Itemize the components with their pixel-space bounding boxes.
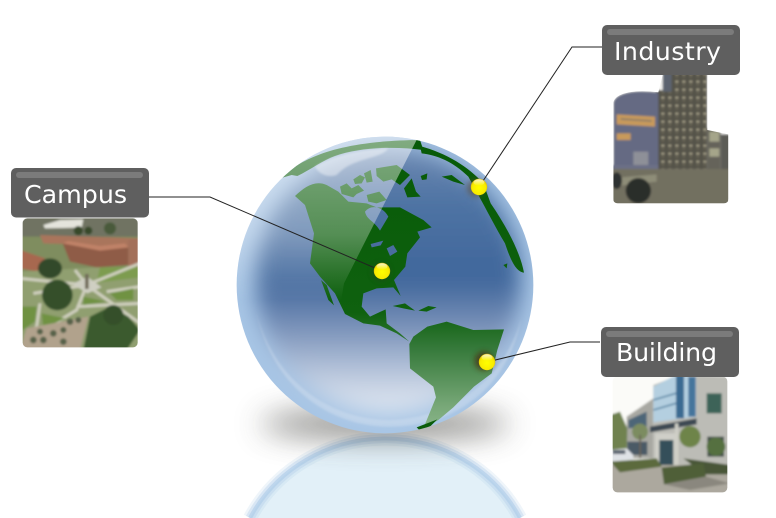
photo: office building — [610, 373, 730, 495]
arctic coastline — [280, 140, 423, 178]
pin: campus — [372, 263, 390, 281]
globe rim — [237, 137, 533, 433]
greenland — [404, 178, 421, 197]
glass highlight — [237, 136, 416, 292]
globe ground shadow — [260, 409, 510, 439]
label: Building: Building — [616, 338, 717, 367]
connector: campus — [149, 197, 382, 271]
baja california — [321, 280, 334, 305]
pin: industry — [467, 179, 487, 197]
continents — [280, 140, 524, 428]
label: Industry: Industry — [614, 37, 721, 66]
connector: building — [487, 342, 600, 362]
connector: industry — [479, 47, 602, 187]
globe — [237, 130, 533, 433]
globe ocean — [256, 147, 521, 413]
north america — [295, 183, 432, 342]
pin: building — [474, 352, 495, 370]
photo: industry towers — [610, 72, 732, 207]
far side landmass crescent — [420, 146, 524, 273]
label: Campus — [11, 168, 149, 218]
inner bottom glow — [264, 332, 518, 426]
label: Industry — [602, 25, 740, 75]
label: Campus: Campus — [24, 180, 127, 209]
polar ice — [315, 148, 388, 176]
arctic islands — [340, 165, 410, 203]
south america — [409, 322, 504, 428]
great lakes — [371, 241, 397, 256]
globe reflection — [250, 439, 520, 518]
far side islands — [421, 173, 507, 268]
caribbean islands — [393, 303, 437, 312]
photo: campus aerial view — [20, 215, 140, 350]
cape horn tip — [416, 420, 438, 430]
label: Building — [601, 327, 739, 377]
